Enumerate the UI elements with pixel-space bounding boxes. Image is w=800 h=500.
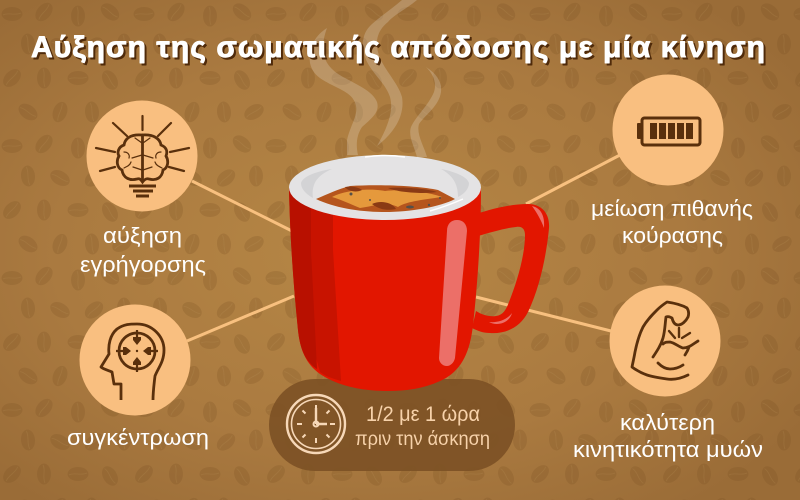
label: αύξηση [103, 223, 182, 248]
mug handle [472, 204, 549, 333]
title: Αύξηση της σωματικής απόδοσης με μία κίνηση [31, 31, 765, 64]
panel: focus [67, 304, 209, 450]
icon: brain bulb [96, 116, 189, 196]
handle highlights [532, 206, 544, 228]
icon: battery [637, 118, 700, 145]
pill text: πριν την άσκηση [355, 429, 490, 450]
time pill [269, 379, 515, 471]
panel: muscle [573, 286, 763, 462]
panel: fatigue [591, 74, 753, 248]
coffee [316, 185, 455, 212]
icon: head with target [101, 324, 164, 400]
body highlight [439, 220, 467, 366]
rim [289, 155, 481, 220]
label: συγκέντρωση [67, 425, 209, 450]
panel: alertness [80, 100, 206, 277]
label: καλύτερη [620, 410, 715, 435]
label line 2: εγρήγορσης [80, 252, 206, 277]
body shade [311, 200, 341, 381]
coffee mug [289, 155, 549, 391]
pill text [355, 403, 490, 450]
label line 2: κινητικότητα μυών [573, 437, 763, 462]
title: Αύξηση της σωματικής απόδοσης με μία κίνηση [33, 33, 767, 66]
icon: clock [287, 395, 345, 453]
label line 2: κούρασης [622, 223, 723, 248]
mug body [289, 188, 481, 391]
label: μείωση πιθανής [591, 196, 753, 221]
pill text: 1/2 με 1 ώρα [366, 403, 480, 426]
connector lines [187, 155, 620, 341]
steam [310, 0, 441, 157]
icon: flexed arm [632, 302, 698, 379]
